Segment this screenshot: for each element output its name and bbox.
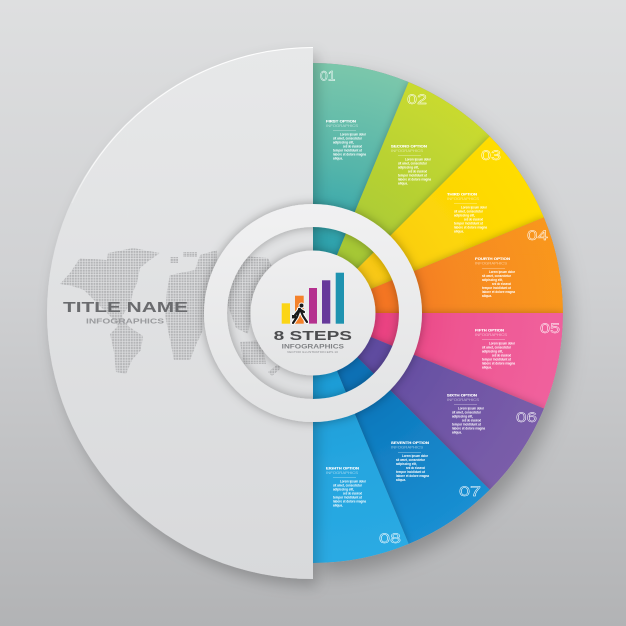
text block: third option: THIRD OPTION (447, 192, 477, 196)
text block: second option: tempor incididunt ut (398, 174, 428, 178)
text block: fourth option: labore et dolore magna (482, 290, 515, 294)
text block: second option: labore et dolore magna (398, 178, 431, 182)
text block: fourth option: INFOGRAPHICS (475, 262, 507, 266)
text block: third option: INFOGRAPHICS (447, 197, 479, 201)
text block: fifth option: tempor incididunt ut (482, 358, 512, 362)
ring (204, 204, 422, 422)
text block: fourth option: sit amet, consectetur (482, 274, 512, 278)
text block: eighth option: labore et dolore magna (333, 500, 366, 504)
text block: seventh option: adipiscing elit, (396, 462, 417, 466)
text block: sixth option: SIXTH OPTION (447, 394, 477, 398)
text block: second option: aliqua. (398, 182, 408, 186)
text block: sixth option: tempor incididunt ut (452, 422, 482, 426)
text block: fifth option (475, 328, 516, 370)
text block: sixth option: sit amet, consectetur (452, 410, 482, 414)
text block: eighth option: sit amet, consectetur (333, 484, 363, 488)
panel: eight coloured wedges (313, 63, 563, 563)
text block: eighth option: adipiscing elit, (333, 488, 354, 492)
text block: second option: adipiscing elit, (398, 166, 419, 170)
wedge 05 (370, 308, 563, 408)
text block: sixth option: adipiscing elit, (452, 414, 473, 418)
text block: third option: labore et dolore magna (454, 226, 487, 230)
text block: eighth option: aliqua. (333, 504, 343, 508)
text block: third option: aliqua. (454, 230, 464, 234)
text block: seventh option: sit amet, consectetur (396, 458, 426, 462)
text block: second option: Lorem ipsum dolor (405, 158, 432, 162)
text block: eighth option: tempor incididunt ut (333, 496, 363, 500)
icon: running businessman (292, 302, 307, 323)
text block: seventh option: sed do eiusmod (406, 466, 425, 470)
text block: first option: labore et dolore magna (333, 152, 366, 156)
text block: seventh option: aliqua. (396, 478, 406, 482)
text block: fourth option: FOURTH OPTION (475, 257, 510, 261)
text block: fourth option: aliqua. (482, 294, 492, 298)
text block: sixth option: labore et dolore magna (452, 426, 485, 430)
number 02: 02 (407, 91, 427, 107)
number 04: 04 (527, 227, 548, 243)
wedge 07 (337, 356, 490, 544)
wedge 01 (313, 63, 408, 256)
title subtitle: INFOGRAPHICS (86, 318, 164, 326)
text block: first option: INFOGRAPHICS (326, 124, 358, 128)
title name: TITLE NAME (63, 300, 188, 316)
center heading: 8 STEPS (274, 329, 352, 343)
text block: second option (391, 144, 432, 186)
text block: eighth option: EIGHTH OPTION (326, 466, 359, 470)
text block: eighth option: sed do eiusmod (343, 492, 362, 496)
text block: second option: INFOGRAPHICS (391, 149, 423, 153)
text block: third option: tempor incididunt ut (454, 222, 484, 226)
text block: second option: sit amet, consectetur (398, 162, 428, 166)
text block: seventh option: SEVENTH OPTION (391, 441, 429, 445)
text block: fifth option: aliqua. (482, 366, 492, 370)
text block: sixth option (447, 394, 485, 434)
text block: fourth option: sed do eiusmod (492, 282, 511, 286)
number 01: 01 (320, 68, 336, 84)
wedge 03 (355, 135, 544, 289)
text block: fourth option: tempor incididunt ut (482, 286, 512, 290)
text block: fourth option: Lorem ipsum dolor (489, 270, 516, 274)
text block: third option: adipiscing elit, (454, 214, 475, 218)
text block: sixth option: INFOGRAPHICS (447, 398, 479, 402)
text block: third option: Lorem ipsum dolor (461, 206, 488, 210)
wedge 06 (357, 334, 544, 490)
text block: fourth option (475, 257, 516, 298)
text block: seventh option (391, 441, 429, 482)
number 03: 03 (481, 147, 501, 163)
text block: eighth option: Lorem ipsum dolor (340, 480, 367, 484)
text block: second option: SECOND OPTION (391, 144, 427, 148)
text block: first option: aliqua. (333, 156, 343, 160)
text block: fourth option: adipiscing elit, (482, 278, 503, 282)
text block: third option: sed do eiusmod (464, 218, 483, 222)
text block: fifth option: Lorem ipsum dolor (489, 342, 516, 346)
center subheading: INFOGRAPHICS (282, 343, 345, 350)
wheel silhouette shadow (313, 63, 563, 563)
text block: fifth option: FIFTH OPTION (475, 328, 504, 332)
half circle highlight edge (72, 48, 313, 203)
text block: first option: sed do eiusmod (343, 144, 362, 148)
number 05: 05 (540, 320, 560, 336)
wedge 08 (313, 370, 410, 563)
text block: fifth option: sed do eiusmod (492, 354, 511, 358)
text block: seventh option: labore et dolore magna (396, 474, 429, 478)
text block: sixth option: Lorem ipsum dolor (458, 406, 485, 410)
number 08: 08 (379, 530, 401, 546)
text block: sixth option: sed do eiusmod (462, 418, 481, 422)
text block: first option: sit amet, consectetur (333, 136, 363, 140)
wedge 02 (334, 82, 490, 269)
text block: second option: sed do eiusmod (408, 170, 427, 174)
text block: fifth option: adipiscing elit, (482, 350, 503, 354)
text block: first option: adipiscing elit, (333, 140, 354, 144)
text block: first option: FIRST OPTION (326, 120, 356, 124)
text block: fifth option: sit amet, consectetur (482, 346, 512, 350)
text block: first option: tempor incididunt ut (333, 148, 363, 152)
text block: first option: Lorem ipsum dolor (340, 132, 367, 136)
text block: seventh option: INFOGRAPHICS (391, 446, 423, 450)
bar chart icon (282, 273, 344, 324)
panel: left half circle (47, 47, 313, 579)
text block: eighth option (326, 466, 367, 508)
dotted world map (60, 248, 281, 376)
text block: eighth option: INFOGRAPHICS (326, 471, 358, 475)
text block: seventh option: Lorem ipsum dolor (402, 454, 429, 458)
center disc (250, 250, 376, 376)
text block: third option: sit amet, consectetur (454, 210, 484, 214)
text block: fifth option: INFOGRAPHICS (475, 333, 507, 337)
text block: first option (326, 120, 367, 160)
number 06: 06 (516, 409, 537, 425)
text block: seventh option: tempor incididunt ut (396, 470, 426, 474)
wedge 04 (370, 215, 563, 313)
text block: fifth option: labore et dolore magna (482, 362, 515, 366)
text block: third option (447, 192, 488, 234)
center caption: VECTOR ILLUSTRATION EPS 10 (287, 351, 339, 354)
text block: sixth option: aliqua. (452, 430, 462, 434)
number 07: 07 (459, 483, 481, 499)
